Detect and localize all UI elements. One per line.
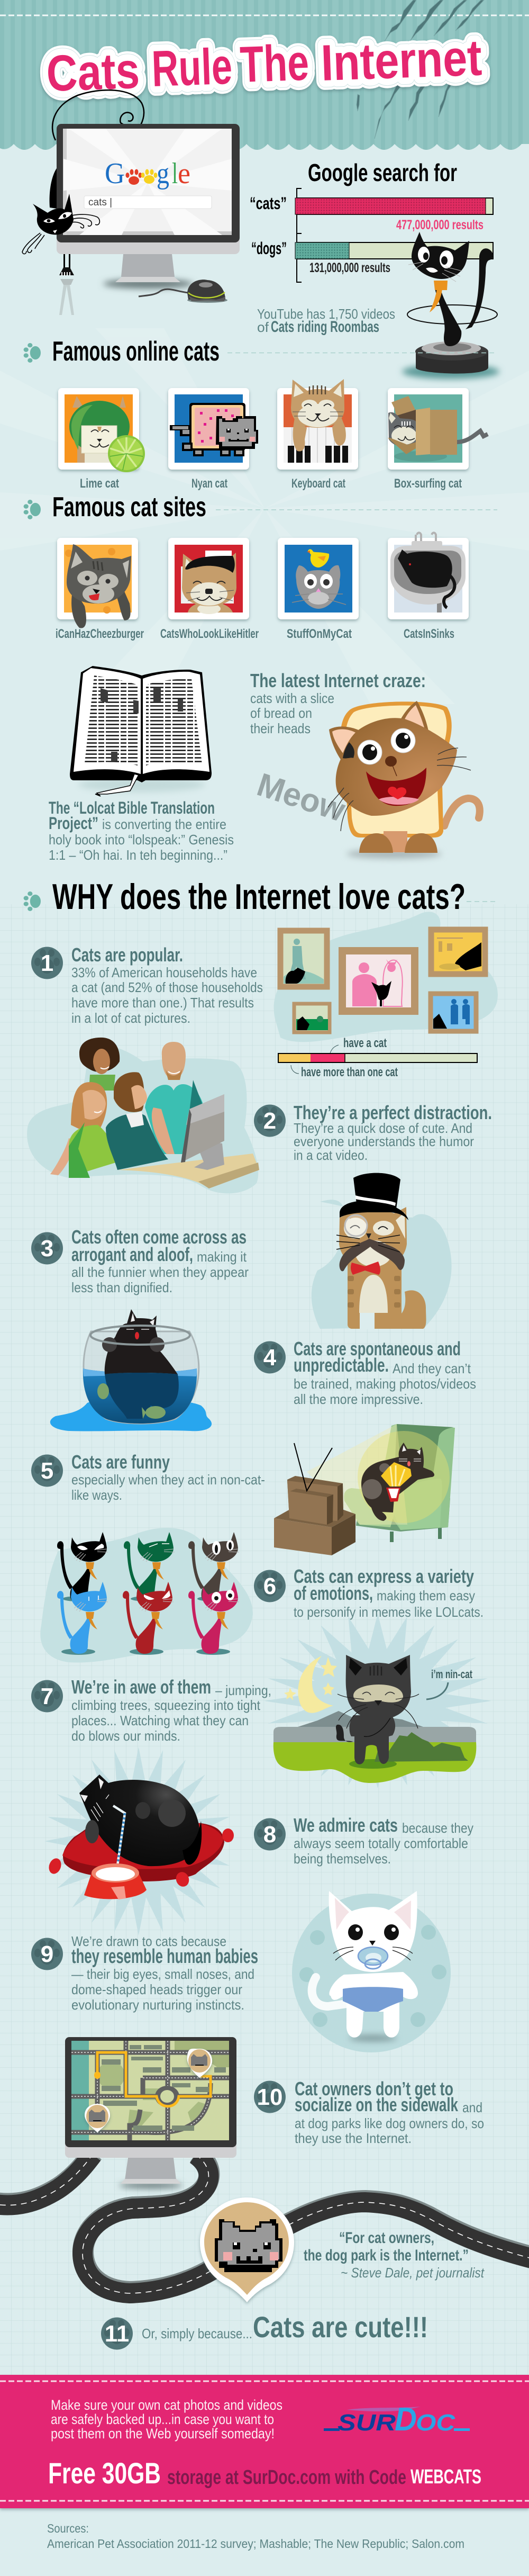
ribbon [95,774,139,796]
illustration: monitor with Google search and peeking cat [22,90,240,315]
shadows [61,1596,230,1655]
blob [40,1528,253,1663]
title stitching ring: Cats [45,42,141,102]
item 2: perfect distraction [254,1102,492,1163]
illustration: cat in fish bowl [50,1309,212,1431]
moustache [340,1239,405,1271]
grey cat [188,1532,239,1604]
promo offer [48,2456,481,2490]
quote: Steve Dale: ~ Steve Dale, pet journalist [341,2265,485,2281]
background rays [0,328,529,704]
number badge [31,1232,63,1264]
item 10: cat owners don't get to socialize: at dog parks like dog owners do, so [295,2115,484,2131]
card: cats in sinks: CatsInSinks [404,627,454,641]
pixel nyan cat [170,403,258,456]
cushion [47,1822,234,1888]
roomba [415,341,488,374]
bow tie [351,1262,380,1275]
annotation: have more than one cat: have more than one cat [301,1065,398,1079]
annotation: have more than one cat [291,1065,398,1079]
monitor body [57,124,240,254]
pink cat [188,1582,239,1654]
blob [274,912,498,1042]
text: lolcat bible translation: The “Lolcat Bible Translation [49,798,215,817]
cats bar: 477,000,000 results [396,218,484,232]
burst [264,1614,491,1788]
monitor shadow [103,279,193,289]
google logo: e [178,157,190,190]
item 7: in awe of them: do blows our minds. [71,1728,180,1744]
illustration: monitor with street map [65,2037,236,2188]
number badge: 6 [263,1573,276,1599]
title inner backing: Internet [320,29,483,92]
frame 1 [280,931,327,987]
quote: Steve Dale: “For cat owners, [339,2229,434,2247]
icon: paw [24,343,41,363]
title sticker backing: Cats [45,42,141,102]
item 2: perfect distraction: everyone understands the humor [294,1133,474,1149]
roomba shadow [402,364,499,379]
icon: paw [24,891,41,911]
illustration: cat riding roomba [402,232,499,379]
pacifier [358,1947,388,1969]
number badge [254,1341,286,1373]
illustration: wall of framed cat pictures [274,912,498,1042]
item 3: arrogant and aloof: making it [197,1249,247,1265]
promo offer: storage at SurDoc.com with Code [167,2466,406,2489]
body [348,1260,426,1329]
google logo: G [105,157,125,190]
item 5: cats are funny: especially when they act in non-cat- [71,1472,265,1488]
number badge [31,1455,63,1487]
card: icanhazcheezburger [56,538,144,641]
item 1: cats are popular: have more than one.) That results [71,995,254,1011]
item 5: cats are funny [31,1451,265,1503]
computer mouse [139,280,227,303]
tan cat [182,553,236,614]
cat body [79,1775,202,1866]
item 11: cats are cute [101,2310,428,2349]
pixel cat face [215,2219,282,2272]
text: lolcat bible translation: 1:1 – “Oh hai. In teh beginning...” [49,847,227,863]
search box: cats | [88,197,112,208]
item 5: cats are funny: like ways. [71,1487,122,1503]
item 3: arrogant and aloof [31,1226,249,1295]
speech label: i'm nin-cat [426,1668,472,1699]
item 7: in awe of them: We’re in awe of them [71,1676,211,1698]
item 6: variety of emotions [254,1565,484,1620]
pages [74,668,141,774]
number badge: 9 [41,1941,53,1967]
number badge: 7 [41,1683,53,1709]
map contents [71,2041,229,2140]
black cat [57,1532,108,1604]
header band [0,0,529,150]
illustration: baby cat with pacifier [292,1891,451,2052]
number badge: 3 [41,1236,53,1262]
water [83,1368,197,1424]
antenna [294,1443,332,1491]
surdoc logo: SUR [338,2410,396,2436]
bread slice [341,701,452,837]
illustration: ninja cat [264,1614,491,1788]
item 9: resemble human babies: evolutionary nurturing instincts. [71,1997,244,2013]
youtube roomba stat: YouTube has 1,750 videos [257,306,395,322]
legs [359,831,437,853]
man in teal scrubs [145,1042,204,1154]
text: lolcat bible translation: Project” [49,814,98,833]
lime helmet [69,396,130,463]
blob [27,1046,258,1193]
monitor stand [115,254,180,282]
desk [118,1154,259,1188]
number badge [31,1680,63,1712]
woman with brown hair [106,1072,168,1170]
graph paper background [0,904,529,2375]
text: lolcat bible translation [49,798,234,863]
item 11: cats are cute: Cats are cute!!! [253,2310,428,2344]
title stitching ring: The [239,34,310,93]
illustration: six coloured cats [40,1528,253,1663]
gray cat [67,544,131,628]
card: box-surfing cat [388,388,488,491]
dogs bar: 131,000,000 results [309,260,390,275]
number badge [31,947,63,979]
frame 5 [431,994,476,1031]
meow: Meow [253,767,350,829]
title sticker backing: The [239,34,310,93]
cat with chick [292,549,346,609]
google logo: g [157,157,169,190]
promo message: Make sure your own cat photos and videos [51,2397,282,2413]
item 4: spontaneous and unpredictable: unpredictable. [294,1354,389,1376]
promo offer: WEBCATS [411,2466,481,2488]
text: latest internet craze: The latest Internet craze: [250,670,426,691]
milk bowl [84,1863,147,1899]
youtube roomba stat: Cats riding Roombas [271,318,379,336]
text: lolcat bible translation: is converting the entire [102,816,226,832]
item 10: cat owners don't get to socialize: they use the Internet. [295,2130,412,2146]
item 4: spontaneous and unpredictable: Cats are spontaneous and [294,1338,461,1359]
title inner backing: Rule [151,38,233,97]
item 10: cat owners don't get to socialize: socialize on the sidewalk [295,2094,459,2115]
number badge: 4 [263,1345,277,1371]
number badge [101,2318,133,2349]
piano keys [288,446,348,463]
book cover [70,666,212,782]
illustration: fat cat on cushion with milk [44,1747,234,1935]
item 9: resemble human babies: dome-shaped heads trigger our [71,1981,242,1997]
promo message [51,2397,282,2442]
frame 3 [431,930,485,974]
stars [299,1925,446,2027]
item 6: variety of emotions: making them easy [377,1588,475,1604]
fish [97,1383,166,1419]
promo message: post them on the Web yourself someday! [51,2426,275,2442]
item 3: arrogant and aloof: arrogant and aloof, [71,1244,193,1265]
section heading: famous online cats: Famous online cats [52,336,220,367]
google logo [105,157,190,190]
green cat [124,1532,175,1604]
map pin with pixel cat [200,2197,294,2302]
bushes [375,1732,468,1762]
section heading: famous online cats [24,336,220,367]
title stitching ring: Rule [151,38,233,97]
sources [47,2521,464,2551]
youtube roomba stat: of [257,319,269,335]
quote: Steve Dale [304,2229,485,2281]
monocle [345,1215,367,1236]
speech label: i'm nin-cat: i’m nin-cat [431,1668,472,1681]
card: lime cat [58,388,145,491]
woman with blonde hair [50,1082,117,1178]
frame 2 [342,951,415,1011]
item 8: admire cats: because they [402,1820,473,1836]
eyes [358,728,415,764]
item 8: admire cats: always seem totally comfortable [294,1835,468,1851]
head [339,1207,407,1268]
number badge [254,1104,286,1137]
item 11: cats are cute: Or, simply because... [142,2326,252,2341]
title sticker backing: Rule [151,38,233,97]
item 7: in awe of them: places... Watching what they can [71,1713,249,1728]
text: lolcat bible translation: holy book into “lolspeak:” Genesis [49,832,234,848]
title inner backing [45,29,483,102]
illustration: lolcat bible [70,666,212,796]
ninja cat figure [336,1655,419,1764]
tail [312,1977,346,2006]
item 6: variety of emotions: to personify in memes like LOLcats. [294,1604,484,1620]
sources: American Pet Association 2011-12 survey; Mashable; The New Republic; Salon.com [47,2537,464,2551]
map pin: upper cat [187,2049,212,2078]
card: lime cat: Lime cat [80,476,119,491]
head [329,1891,417,1972]
fat cat [361,1443,434,1521]
hills and grass [273,1711,476,1783]
item 5: cats are funny: Cats are funny [71,1451,170,1473]
title wording [45,29,483,102]
title inner backing: The [239,34,310,93]
promo message: are safely backed up...in case you want to [51,2411,274,2427]
monitor stand [119,2158,183,2188]
tv on stand [274,1476,355,1555]
section heading: famous cat sites: Famous cat sites [52,492,206,523]
item 3: arrogant and aloof: all the funnier when they appear [71,1264,249,1280]
item 1: cats are popular: Cats are popular. [71,944,183,966]
text: latest internet craze: of bread on [250,705,312,721]
head [336,718,457,816]
number badge: 2 [263,1108,276,1134]
text: latest internet craze: their heads [250,720,311,736]
woman with curly hair [79,1038,120,1091]
item 7: in awe of them [31,1676,271,1744]
surdoc logo: OC [416,2410,455,2436]
number badge: 8 [263,1822,276,1848]
item 1: cats are popular: in a lot of cat pictures. [71,1010,190,1026]
title inner backing: Cats [45,42,141,102]
item 9: resemble human babies [31,1933,258,2013]
item 8: admire cats [254,1814,473,1867]
surdoc logo: D [395,2401,417,2438]
item 9: resemble human babies: We’re drawn to cats because [71,1933,226,1949]
item 1: cats are popular: a cat (and 52% of those households [71,979,263,995]
claw scratches [357,0,484,139]
cats bar: “cats” [250,194,287,213]
item 9: resemble human babies: they resemble human babies [71,1945,258,1968]
page text [85,675,138,765]
item 10: cat owners don't get to socialize: and [462,2100,482,2115]
item 3: arrogant and aloof: less than dignified. [71,1280,172,1295]
star oval backdrop [292,1894,451,2052]
chart: Google search results [250,159,493,282]
cat on roomba [408,232,493,346]
tail [444,798,480,826]
item 6: variety of emotions: Cats can express a variety [294,1565,474,1587]
illustration: cat with top hat and monocle [312,1173,452,1329]
quote: Steve Dale: the dog park is the Internet.” [304,2247,469,2264]
text: latest internet craze [250,670,426,736]
chart axis [297,188,302,282]
title [45,29,483,102]
item 10: cat owners don't get to socialize: Cat owners don’t get to [295,2078,453,2100]
box and cat [388,396,488,455]
card: stuff on my cat [278,538,359,641]
dogs bar: “dogs” [251,239,287,258]
card: keyboard cat [277,379,358,491]
section heading: famous cat sites [24,492,206,523]
title stitching ring [45,29,483,102]
number badge [254,1818,286,1851]
map pin: lower cat [85,2104,110,2132]
title sticker backing: Internet [320,29,483,92]
item 10: cat owners don't get to socialize [254,2078,484,2146]
item 4: spontaneous and unpredictable: And they can’t [393,1361,471,1376]
card: nyan cat: Nyan cat [191,476,227,491]
diaper [343,1987,403,2012]
number badge: 1 [41,950,53,976]
title wording: Rule [151,38,233,97]
chart heading: Google search for [308,159,457,186]
number badge: 5 [41,1458,53,1484]
illustration: coworkers watching a computer [27,1038,259,1193]
puddle [50,1398,212,1431]
cats bar [250,194,493,232]
armchair [344,1424,455,1542]
item 9: resemble human babies: — their big eyes, small noses, and [71,1966,254,1982]
number badge: 11 [105,2321,129,2347]
title sticker backing [45,29,483,102]
card: stuff on my cat: StuffOnMyCat [287,627,352,641]
annotation: have a cat: have a cat [343,1036,387,1050]
youtube roomba stat [257,306,395,336]
chart: cat ownership bar [278,1036,477,1079]
item 8: admire cats: being themselves. [294,1851,391,1867]
lime slice [108,435,145,472]
cat tail [52,90,144,140]
title stitching ring: Internet [320,29,483,92]
item 4: spontaneous and unpredictable: be trained, making photos/videos [294,1376,476,1392]
bowl rim [90,1326,190,1345]
scribble [312,1200,452,1329]
crescent moon [284,1656,337,1713]
card: box-surfing cat: Box-surfing cat [394,476,462,491]
sources: Sources: [47,2521,89,2535]
title wording: Internet [320,29,483,92]
red cat [123,1582,174,1654]
hoops [407,305,497,324]
item 4: spontaneous and unpredictable [254,1338,476,1407]
item 1: cats are popular: 33% of American households have [71,965,257,980]
item 6: variety of emotions: of emotions, [294,1582,373,1604]
card: cats in sinks [388,533,469,641]
item 4: spontaneous and unpredictable: all the more impressive. [294,1391,423,1407]
illustration: cat with bread on head [253,701,480,859]
promo offer: Free 30GB [48,2456,161,2490]
number badge: 10 [257,2084,282,2110]
title wording: The [239,34,310,93]
item 2: perfect distraction: in a cat video. [294,1147,368,1163]
promo panel: SurDoc [0,2375,529,2508]
title wording: Cats [45,42,141,102]
annotation: have a cat [330,1036,387,1053]
text: latest internet craze: cats with a slice [250,690,334,706]
search box [84,196,212,209]
google logo: l [172,157,178,190]
computer monitor [181,1094,224,1170]
illustration: cat on armchair watching tv [274,1424,455,1555]
body [329,1972,418,2038]
item 7: in awe of them: – jumping, [215,1682,271,1698]
fries [381,1462,412,1502]
sink and black cat [390,533,466,613]
item 7: in awe of them: climbing trees, squeezing into tight [71,1697,261,1713]
mouth [366,768,426,806]
surdoc logo [324,2401,470,2438]
card: nyan cat [168,388,258,491]
number badge [254,1570,286,1602]
card: cats who look like hitler [160,538,259,641]
card: icanhazcheezburger: iCanHazCheezburger [56,627,144,641]
top hat [340,1173,408,1220]
item 2: perfect distraction: They’re a quick dose of cute. And [294,1120,472,1136]
card: cats who look like hitler: CatsWhoLookLikeHitler [160,627,259,641]
number badge [31,1938,63,1970]
item 8: admire cats: We admire cats [294,1814,398,1836]
striped straw [113,1806,125,1880]
bowl [84,1331,199,1424]
burst [44,1747,233,1935]
item 3: arrogant and aloof: Cats often come across as [71,1226,247,1248]
tv light beam [307,1424,450,1525]
black cat [22,168,99,315]
blue cat [57,1582,108,1654]
card: keyboard cat: Keyboard cat [291,476,345,491]
ears [329,701,430,762]
number badge [254,2080,286,2113]
icon: paw [24,500,41,519]
frame 4 [294,1004,330,1032]
item 1: cats are popular [31,944,263,1026]
illustration: road winding across page [0,2153,529,2293]
dogs bar [251,239,493,275]
cat [102,1309,179,1419]
keyboard cat figure [291,379,346,452]
